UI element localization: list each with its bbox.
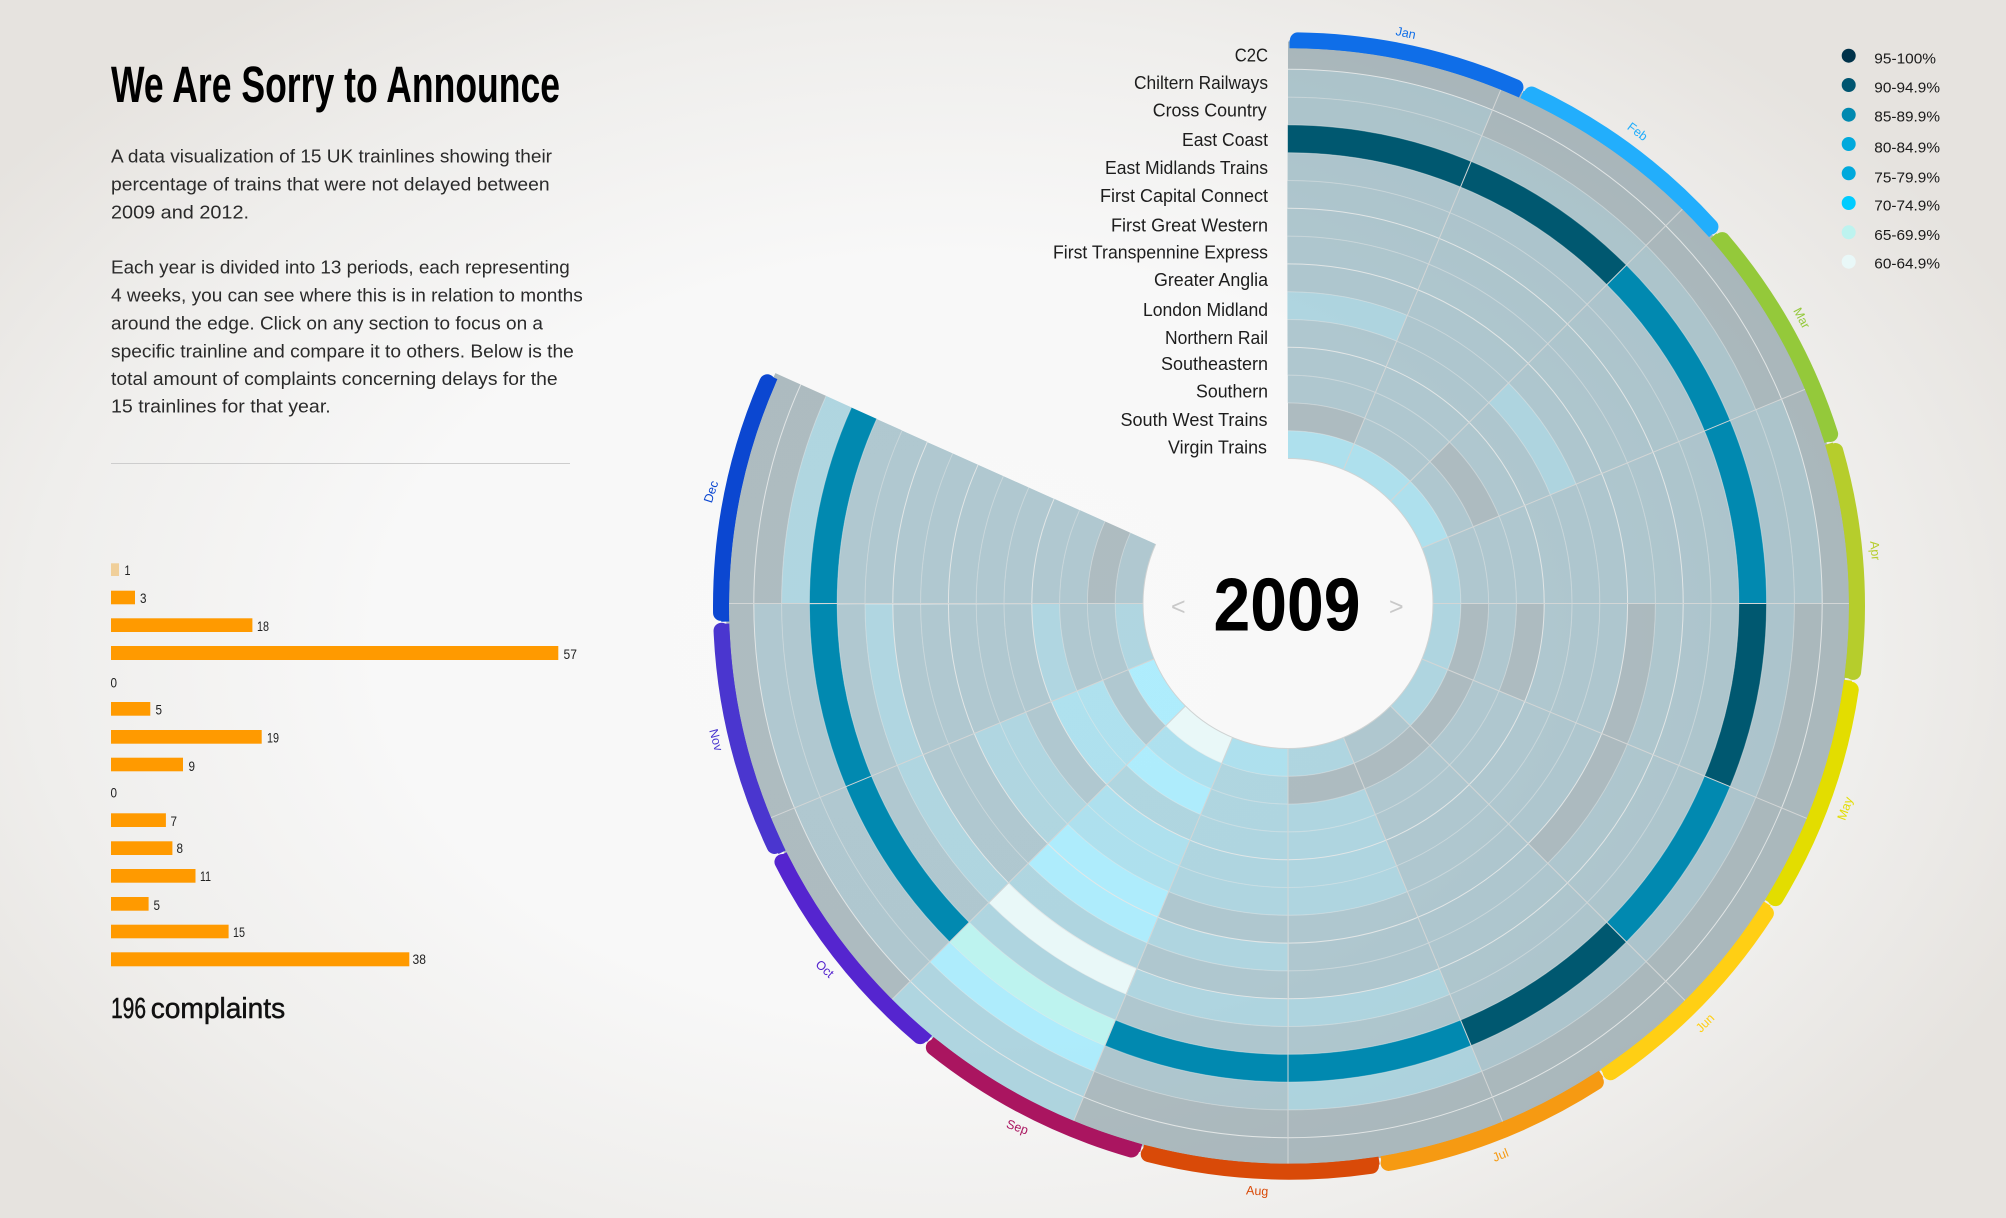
trainline labels: London Midland: [1143, 299, 1268, 320]
month labels: May: [1835, 794, 1856, 822]
ring: Chiltern Railways: [768, 83, 1808, 1124]
legend item 65-69.9%: [1842, 225, 1940, 244]
ring: East Coast: [823, 139, 1753, 1068]
bar: Greater Anglia 0: 0: [110, 784, 117, 800]
intro text block: [111, 147, 583, 417]
bar: Chiltern Railways 3: 3: [140, 590, 147, 606]
bar: First Great Western 19: [111, 730, 279, 746]
legend item 90-94.9%: [1842, 78, 1940, 97]
intro text block: specific trainline and compare it to others. Below is the: [111, 341, 574, 361]
arc: Jun: [721, 40, 1857, 1172]
bar: Southern 5: [111, 897, 160, 913]
trainline labels: Southern: [1196, 380, 1268, 401]
intro text block: 2009 and 2012.: [111, 203, 249, 223]
legend: [1842, 49, 1940, 272]
bar: First Capital Connect 5: 5: [156, 702, 162, 718]
ring: First Transpennine Express: [934, 250, 1642, 957]
arc: Mar: [721, 40, 1857, 1172]
arc: Aug: [721, 40, 1857, 1172]
trainline labels: Cross Country: [1153, 100, 1267, 121]
month labels: Dec: [701, 479, 721, 505]
bar: Southeastern 11: [111, 868, 211, 884]
bar chart: complaints per trainline: [110, 562, 577, 967]
trainline labels: East Coast: [1182, 129, 1268, 150]
arc: Nov: [721, 40, 1857, 1172]
legend item 90-94.9%: 90-94.9%: [1874, 80, 1940, 97]
legend item 75-79.9%: 75-79.9%: [1874, 170, 1940, 187]
ring: First Capital Connect: [879, 194, 1697, 1013]
month labels: Aug: [1246, 1183, 1269, 1199]
trainline labels: Northern Rail: [1165, 327, 1268, 348]
ring: Greater Anglia: [962, 278, 1614, 929]
month labels: Feb: [1625, 120, 1650, 144]
bar: South West Trains 15: 15: [233, 924, 245, 940]
bar: Virgin Trains 38: [111, 951, 426, 967]
ring: Virgin Trains: [1129, 445, 1447, 762]
month labels: Oct: [813, 957, 837, 981]
trainline labels: C2C: [1235, 45, 1268, 66]
intro text block: 15 trainlines for that year.: [111, 397, 331, 417]
trainline labels: Virgin Trains: [1168, 436, 1267, 457]
bar: London Midland 7: [111, 813, 177, 829]
intro text block: A data visualization of 15 UK trainlines showing their: [111, 147, 552, 167]
legend item 70-74.9%: [1842, 196, 1940, 215]
bar: Cross Country 18: [111, 618, 269, 634]
arc: Feb: [721, 40, 1857, 1172]
bar: First Transpennine Express 9: 9: [188, 758, 195, 774]
ring: First Great Western: [907, 222, 1669, 985]
month labels: Apr: [1867, 540, 1883, 561]
bar: London Midland 7: 7: [170, 813, 177, 829]
trainline labels: First Capital Connect: [1100, 185, 1268, 206]
month labels: Nov: [706, 727, 726, 753]
legend item 60-64.9%: [1842, 255, 1940, 272]
bar: Southern 5: 5: [154, 897, 160, 913]
ring: Southeastern: [1046, 361, 1530, 846]
ring: Northern Rail: [1018, 333, 1558, 874]
trainline labels: First Great Western: [1111, 214, 1268, 235]
total complaints: 196: [111, 993, 146, 1025]
arc: Jul: [721, 40, 1857, 1172]
trainline labels: [1053, 45, 1269, 457]
intro text block: percentage of trains that were not delayed between: [111, 175, 550, 195]
legend item 95-100%: [1842, 49, 1936, 67]
bar: Northern Rail 8: 8: [176, 840, 183, 856]
bar: East Midlands Trains 0: 0: [110, 674, 117, 690]
trainline labels: South West Trains: [1120, 409, 1268, 430]
bar: C2C 1: [111, 562, 131, 578]
bar: Chiltern Railways 3: [111, 590, 147, 606]
bar: Northern Rail 8: [111, 840, 183, 856]
bar: Southeastern 11: 11: [200, 868, 211, 884]
ring: Cross Country: [796, 111, 1780, 1096]
year: 2009: [1214, 562, 1360, 646]
month labels: Jul: [1490, 1146, 1511, 1165]
arc: Oct: [721, 40, 1857, 1172]
arc: Sep: [721, 40, 1857, 1172]
month labels: Jan: [1395, 24, 1417, 42]
trainline labels: First Transpennine Express: [1053, 241, 1268, 262]
legend item 65-69.9%: 65-69.9%: [1874, 227, 1940, 244]
previous year arrow: <: [1171, 593, 1186, 621]
legend item 80-84.9%: [1842, 137, 1940, 157]
legend item 80-84.9%: 80-84.9%: [1874, 140, 1940, 157]
trainline labels: East Midlands Trains: [1105, 157, 1268, 178]
trainline labels: Greater Anglia: [1154, 269, 1269, 290]
bar: C2C 1: 1: [124, 562, 131, 578]
arc: May: [721, 40, 1857, 1172]
chart cells: [740, 55, 1836, 1152]
legend item 85-89.9%: 85-89.9%: [1874, 109, 1940, 126]
bar: East Coast 57: 57: [564, 646, 577, 662]
legend item 95-100%: 95-100%: [1874, 50, 1936, 67]
bar: First Great Western 19: 19: [267, 730, 279, 746]
bar: First Transpennine Express 9: [111, 758, 195, 774]
legend item 70-74.9%: 70-74.9%: [1874, 198, 1940, 215]
title: We Are Sorry to Announce: [111, 56, 560, 113]
month labels: Sep: [1005, 1117, 1030, 1138]
month labels: Jun: [1693, 1011, 1717, 1035]
bar: South West Trains 15: [111, 924, 245, 940]
ring: Southern: [1074, 389, 1502, 818]
arc: Jan: [721, 40, 1857, 1172]
radial chart: [726, 55, 1850, 1166]
month labels: Mar: [1790, 305, 1813, 331]
arc: Dec: [721, 40, 1857, 1172]
month arcs: [721, 40, 1857, 1172]
legend item 75-79.9%: [1842, 166, 1940, 187]
bar: Virgin Trains 38: 38: [412, 951, 426, 967]
legend item 60-64.9%: 60-64.9%: [1874, 255, 1940, 272]
intro text block: total amount of complaints concerning delays for the: [111, 369, 558, 389]
trainline labels: Chiltern Railways: [1134, 72, 1268, 93]
trainline labels: Southeastern: [1161, 353, 1268, 374]
arc: Apr: [721, 40, 1857, 1172]
next year arrow: >: [1389, 593, 1404, 621]
bar: Cross Country 18: 18: [257, 618, 269, 634]
ring: London Midland: [990, 306, 1586, 901]
intro text block: 4 weeks, you can see where this is in relation to months: [111, 286, 583, 306]
total complaints: complaints: [151, 993, 285, 1025]
intro text block: Each year is divided into 13 periods, each representing: [111, 257, 570, 277]
ring: East Midlands Trains: [851, 167, 1725, 1040]
legend item 85-89.9%: [1842, 108, 1940, 126]
intro text block: around the edge. Click on any section to focus on a: [111, 313, 544, 333]
ring: C2C: [740, 55, 1836, 1152]
ring: South West Trains: [1101, 417, 1475, 790]
bar: First Capital Connect 5: [111, 702, 162, 718]
month labels: [701, 24, 1883, 1199]
bar: East Coast 57: [111, 646, 577, 662]
